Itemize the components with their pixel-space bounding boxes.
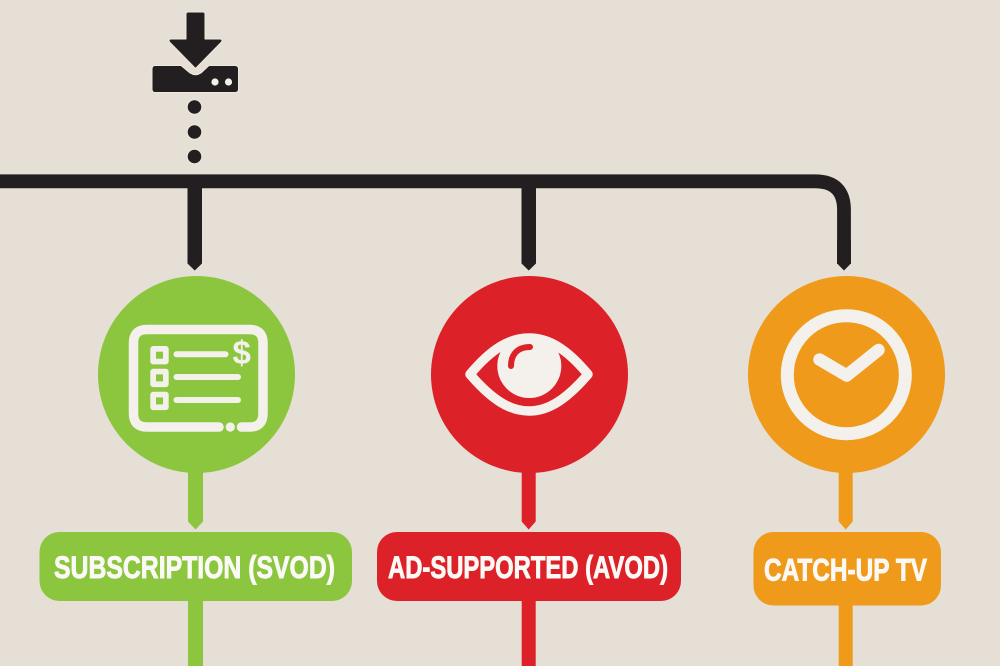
green label (40, 532, 352, 601)
arrow: into catch-up (837, 240, 851, 270)
icon: subscription price list (134, 330, 263, 432)
icon: subscription price list: $ (233, 334, 251, 371)
icon: download to set-top box (152, 12, 238, 92)
red label: AD-SUPPORTED (AVOD) (388, 549, 668, 585)
connector: below green label (188, 595, 203, 666)
panel: ad-supported column (377, 276, 681, 666)
orange label: CATCH-UP TV (764, 552, 927, 588)
dotted connector (187, 100, 202, 164)
panel: catch-up column (748, 276, 945, 666)
arrow: into subscription (188, 185, 202, 270)
connector: circle to red label (522, 465, 536, 530)
green label: SUBSCRIPTION (SVOD) (54, 549, 335, 585)
red circle (431, 276, 628, 473)
orange label (754, 532, 941, 606)
panel: subscription column (40, 276, 352, 666)
red label (377, 532, 681, 601)
arrow: into ad-supported (522, 185, 536, 270)
orange circle (748, 276, 945, 473)
icon: eye (470, 334, 588, 411)
green circle (98, 276, 295, 473)
connector: below orange label (839, 600, 853, 666)
connector: below red label (522, 595, 536, 666)
connector: circle to green label (188, 465, 203, 530)
connector: circle to orange label (839, 465, 853, 530)
icon: clock (787, 316, 905, 434)
horizontal connector bar with rounded corner (0, 181, 844, 264)
